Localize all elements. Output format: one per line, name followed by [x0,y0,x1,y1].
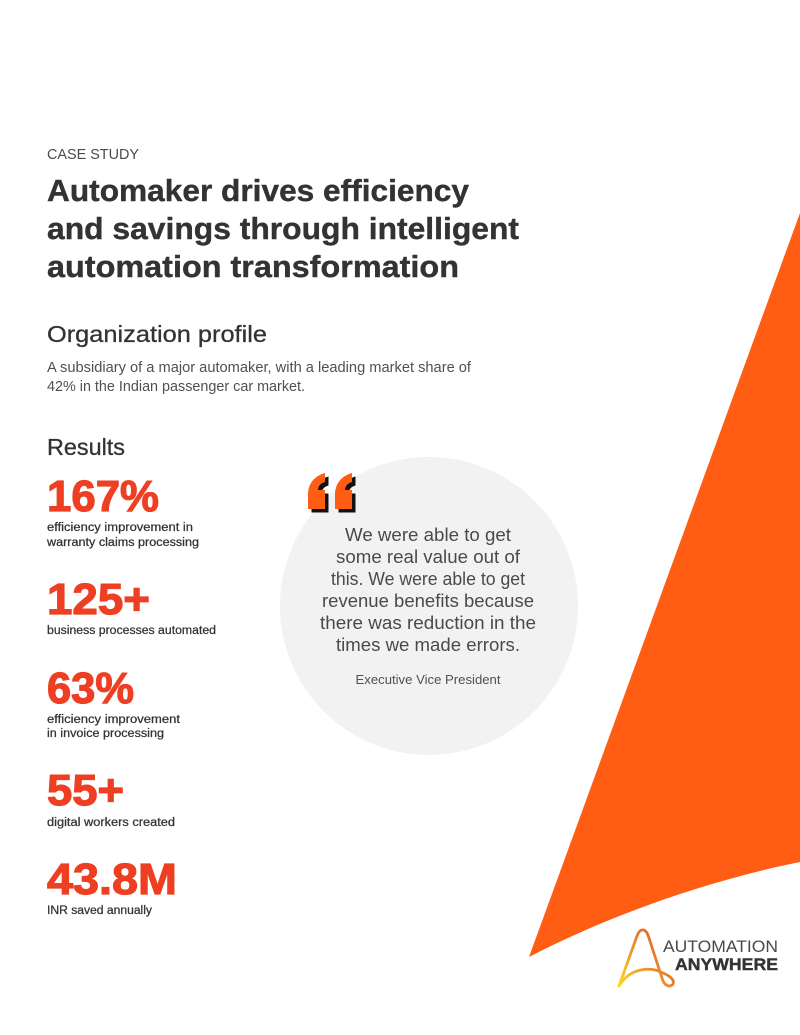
result: 167% [46,472,199,549]
icon: quotation marks [308,473,356,512]
title: and savings through intelligent [47,211,519,246]
heading: organization profile: Organization profile [47,321,267,347]
result: 125+ [47,575,216,637]
result: 125+: 125+ [47,575,150,624]
organization description [47,360,472,395]
result: 55+ [47,766,175,829]
result: 167%: 167% [47,472,159,521]
orange sail shape [529,213,800,957]
quote text: some real value out of [336,546,521,567]
result: 63% [47,664,181,740]
result: 43.8M: INR saved annually [47,905,152,917]
logo wordmark: AUTOMATION [663,938,778,956]
title: Automaker drives efficiency [47,173,470,208]
heading: results: Results [47,434,125,460]
result: 167%: efficiency improvement in [47,522,193,534]
quote text: there was reduction in the [320,612,536,633]
organization description: A subsidiary of a major automaker, with a leading market share of [47,360,472,376]
result: 63%: efficiency improvement [47,714,181,726]
quote text: times we made errors. [336,634,520,655]
quote text: this. We were able to get [331,568,525,589]
result: 55+: 55+ [47,766,124,815]
icon: logo mark [619,930,673,986]
eyebrow: case study: CASE STUDY [47,146,139,163]
title: automation transformation [47,249,459,284]
quote attribution: Executive Vice President [356,672,501,687]
result: 55+: digital workers created [47,817,175,829]
quote text: revenue benefits because [322,590,534,611]
quote circle background [280,457,578,755]
logo: Automation Anywhere: ANYWHERE [675,956,778,974]
result: 125+: business processes automated [47,625,216,637]
logo: Automation Anywhere [619,930,778,986]
title [47,173,519,284]
result: 63%: in invoice processing [47,728,164,740]
quote text [320,524,536,655]
result: 43.8M: 43.8M [47,855,177,904]
result: 167%: warranty claims processing [46,537,199,549]
organization description: 42% in the Indian passenger car market. [47,379,305,395]
result: 63%: 63% [47,664,134,713]
quote text: We were able to get [345,524,511,545]
